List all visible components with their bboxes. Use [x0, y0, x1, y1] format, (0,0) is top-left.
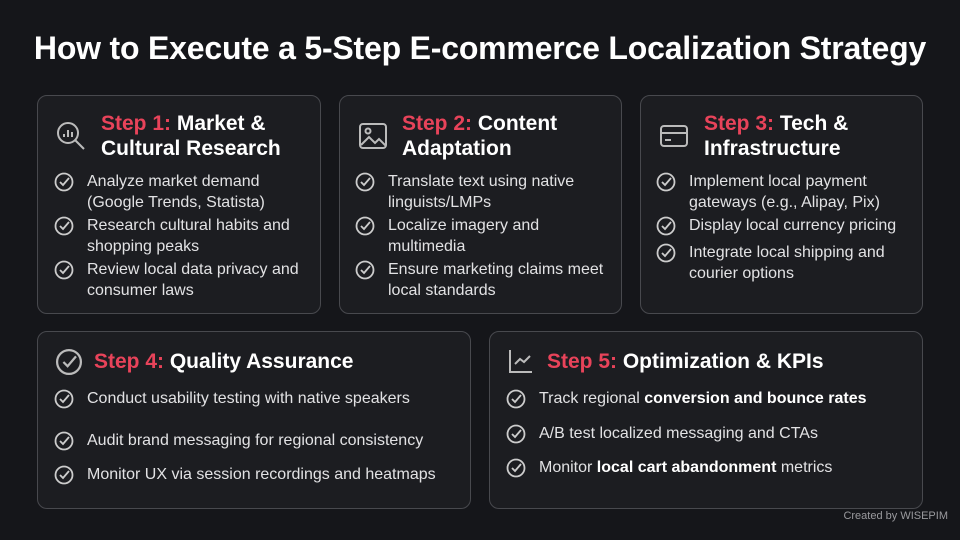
icon: image	[359, 123, 387, 149]
panel: step 4	[37, 331, 471, 509]
heading: Step 4: Quality Assurance	[94, 350, 353, 373]
panel: step 2: local standards	[388, 282, 496, 299]
panel: step 1: (Google Trends, Statista)	[87, 194, 265, 211]
icon: line chart	[509, 350, 532, 373]
panel: step 3: Integrate local shipping and	[689, 244, 885, 261]
heading: Infrastructure	[704, 137, 841, 160]
panel: step 3: Display local currency pricing	[689, 217, 896, 234]
panel: step 5: A/B test localized messaging and CTAs	[539, 425, 818, 442]
title: How to Execute a 5-Step E-commerce Localization Strategy	[34, 30, 926, 66]
heading: Adaptation	[402, 137, 512, 160]
heading	[101, 112, 281, 160]
panel: step 2: Localize imagery and	[388, 217, 539, 234]
heading	[704, 112, 848, 160]
panel: step 4: Audit brand messaging for regional consistency	[87, 432, 423, 449]
panel: step 4: Monitor UX via session recordings and heatmaps	[87, 466, 436, 483]
heading: Step 5: Optimization & KPIs	[547, 350, 824, 373]
list	[54, 172, 299, 299]
icon: check circle	[56, 349, 82, 375]
panel: step 1	[37, 95, 321, 314]
panel: step 1: consumer laws	[87, 282, 194, 299]
icon: magnifier chart	[57, 122, 85, 150]
panel: step 2: Ensure marketing claims meet	[388, 261, 603, 278]
footer credit: Created by WISEPIM	[843, 510, 948, 522]
icon: card	[660, 125, 688, 147]
panel: step 4: Conduct usability testing with native speakers	[87, 390, 410, 407]
heading: Step 1: Market &	[101, 112, 266, 135]
panel: step 2: linguists/LMPs	[388, 194, 491, 211]
panel: step 5: Monitor local cart abandonment metrics	[539, 459, 832, 476]
list	[656, 172, 896, 282]
panel: step 3: Implement local payment	[689, 173, 867, 190]
panel: step 5	[489, 331, 923, 509]
list	[54, 390, 436, 484]
panel: step 3	[640, 95, 923, 314]
heading: Step 2: Content	[402, 112, 557, 135]
panel: step 3: courier options	[689, 265, 794, 282]
list	[506, 390, 867, 478]
panel: step 2: multimedia	[388, 238, 465, 255]
list	[356, 172, 604, 299]
panel: step 3: gateways (e.g., Alipay, Pix)	[689, 194, 880, 211]
panel: step 2: Translate text using native	[388, 173, 574, 190]
panel: step 1: Research cultural habits and	[87, 217, 290, 234]
heading	[402, 112, 557, 160]
panel: step 5: Track regional conversion and bounce rates	[539, 390, 867, 407]
heading: Cultural Research	[101, 137, 281, 160]
panel: step 2	[339, 95, 622, 314]
heading: Step 3: Tech &	[704, 112, 848, 135]
panel: step 1: shopping peaks	[87, 238, 199, 255]
panel: step 1: Review local data privacy and	[87, 261, 299, 278]
panel: step 1: Analyze market demand	[87, 173, 260, 190]
